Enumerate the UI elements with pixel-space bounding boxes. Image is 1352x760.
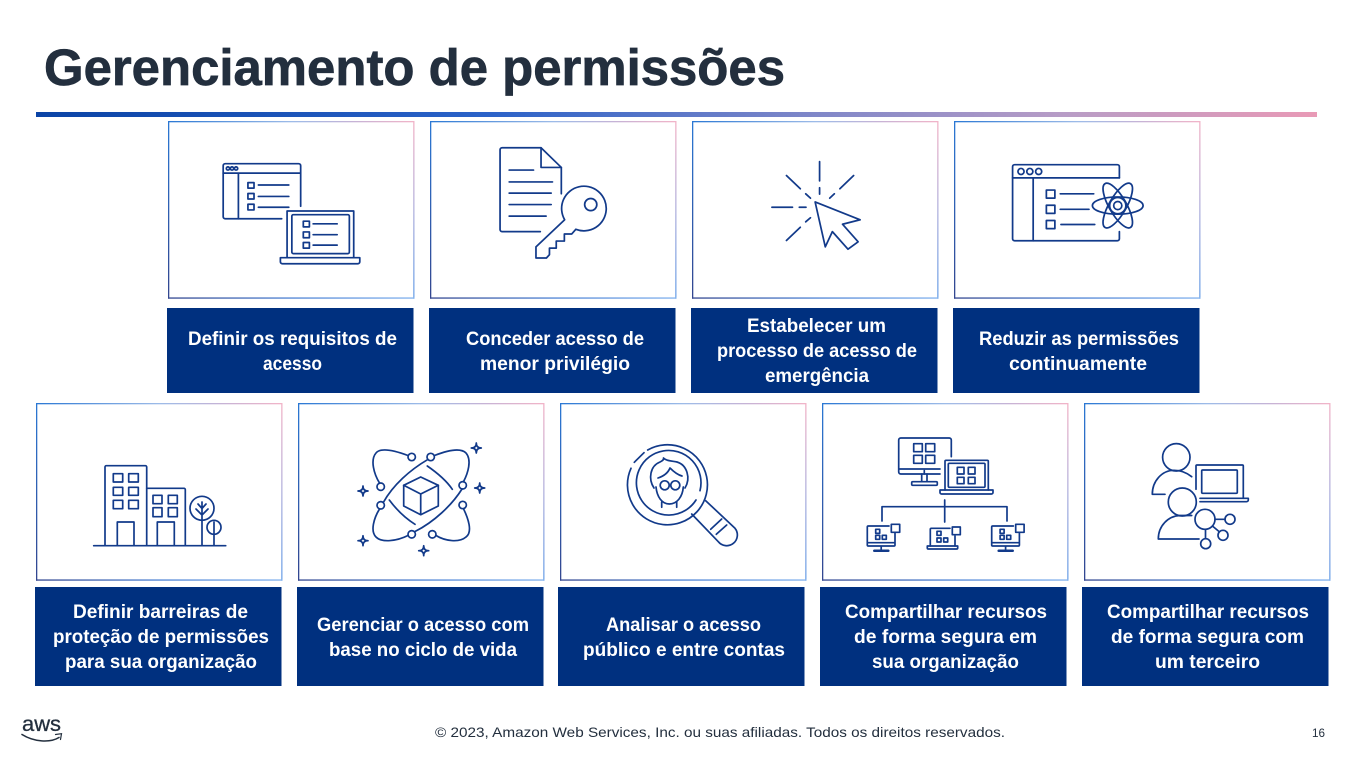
icon: computers network bbox=[867, 438, 1024, 551]
label: reduzir permissões: continuamente bbox=[1009, 353, 1147, 375]
label: reduzir permissões bbox=[953, 308, 1200, 393]
label: definir requisitos: acesso bbox=[263, 353, 322, 375]
label: ciclo de vida: Gerenciar o acesso com bbox=[317, 614, 529, 636]
icon: people, laptop and nodes bbox=[1152, 444, 1248, 549]
card: reduzir permissões bbox=[954, 121, 1200, 299]
label: acesso de emergência: emergência bbox=[765, 365, 869, 387]
label: compartilhar com terceiro bbox=[1082, 587, 1328, 686]
label: compartilhar com terceiro: um terceiro bbox=[1155, 651, 1260, 673]
label: definir requisitos bbox=[167, 308, 414, 393]
icon: buildings and trees bbox=[94, 466, 226, 546]
label: menor privilégio bbox=[429, 308, 676, 393]
card: menor privilégio bbox=[430, 121, 676, 299]
title: Gerenciamento de permissões bbox=[44, 39, 785, 96]
label: menor privilégio: Conceder acesso de bbox=[466, 328, 644, 350]
label: barreiras de proteção: para sua organização bbox=[65, 651, 257, 673]
sub-icon: middle laptop bbox=[927, 527, 960, 549]
sub-icon: left monitor bbox=[867, 524, 900, 551]
card: acesso de emergência bbox=[692, 121, 938, 299]
sub-icon: right monitor bbox=[992, 524, 1024, 551]
icon: clicking cursor bbox=[772, 162, 860, 249]
footer copyright: © 2023, Amazon Web Services, Inc. ou suas afiliadas. Todos os direitos reservados. bbox=[435, 724, 1005, 740]
label: compartilhar na organização: de forma segura em bbox=[854, 626, 1037, 648]
label: definir requisitos: Definir os requisitos de bbox=[188, 328, 397, 350]
label: barreiras de proteção bbox=[35, 587, 282, 686]
logo: aws: aws bbox=[22, 713, 61, 736]
card: barreiras de proteção bbox=[36, 403, 282, 581]
card: compartilhar na organização bbox=[822, 403, 1068, 581]
card: acesso público bbox=[560, 403, 806, 581]
icon: cube in orbits bbox=[358, 443, 485, 556]
label: barreiras de proteção: proteção de permissões bbox=[53, 626, 269, 648]
label: acesso de emergência: processo de acesso de bbox=[717, 340, 917, 362]
label: compartilhar na organização: sua organização bbox=[872, 651, 1019, 673]
label: compartilhar na organização: Compartilhar recursos bbox=[845, 601, 1047, 623]
page number: 16 bbox=[1312, 726, 1325, 740]
icon: document and key bbox=[500, 148, 606, 258]
label: menor privilégio: menor privilégio bbox=[480, 353, 630, 375]
icon: window and laptop checklist bbox=[223, 164, 360, 264]
card: ciclo de vida bbox=[298, 403, 544, 581]
label: acesso público: Analisar o acesso bbox=[606, 614, 761, 636]
icon: magnifier with person bbox=[627, 445, 737, 546]
label: compartilhar com terceiro: Compartilhar recursos bbox=[1107, 601, 1309, 623]
label: compartilhar na organização bbox=[820, 587, 1066, 686]
label: acesso público bbox=[558, 587, 804, 686]
label: ciclo de vida: base no ciclo de vida bbox=[329, 639, 517, 661]
label: barreiras de proteção: Definir barreiras de bbox=[73, 601, 248, 623]
label: acesso público: público e entre contas bbox=[583, 639, 785, 661]
card: definir requisitos bbox=[168, 121, 414, 299]
icon: window with atom bbox=[1013, 165, 1143, 241]
card: compartilhar com terceiro bbox=[1084, 403, 1330, 581]
label: reduzir permissões: Reduzir as permissões bbox=[979, 328, 1179, 350]
label: acesso de emergência bbox=[691, 308, 938, 393]
header gradient bar bbox=[36, 112, 1317, 117]
label: compartilhar com terceiro: de forma segura com bbox=[1111, 626, 1304, 648]
label: acesso de emergência: Estabelecer um bbox=[747, 315, 886, 337]
label: ciclo de vida bbox=[297, 587, 544, 686]
